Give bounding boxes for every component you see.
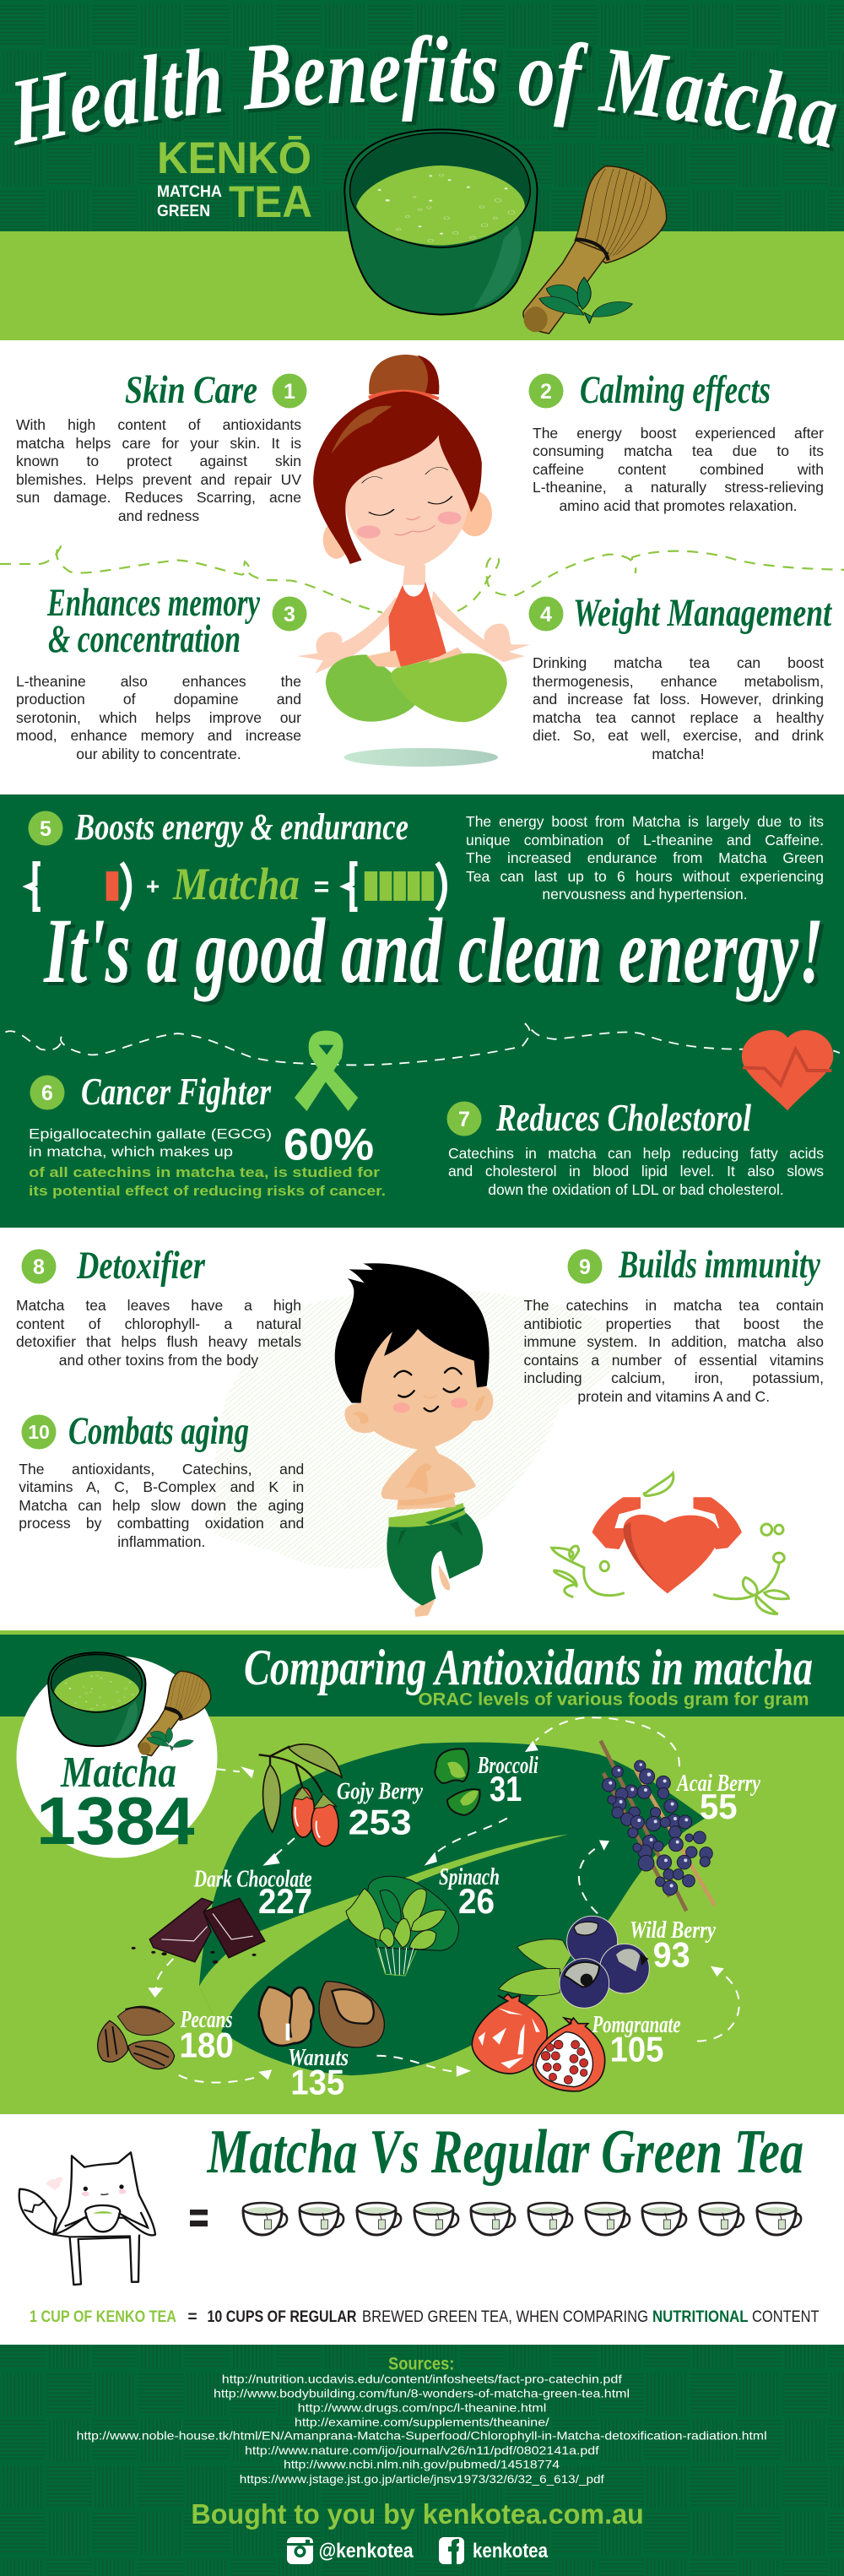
text: energy boost explanation: The increased endurance from Matcha Green [466, 849, 824, 866]
item 1: Skin Care: blemishes. Helps prevent and repair UV [16, 471, 301, 488]
item 9: Builds immunity: 9 [579, 1255, 591, 1279]
item 1: Skin Care: Skin Care [125, 368, 257, 412]
item 3: Enhances memory: serotonin, which helps improve our [16, 709, 301, 726]
item 3: Enhances memory: production of dopamine and [16, 691, 301, 708]
item 7: Reduces Cholestorol: Reduces Cholestorol [495, 1096, 751, 1139]
icon: awareness ribbon [295, 1031, 358, 1111]
item 10: Combats aging: vitamins A, C, B-Complex and K in [19, 1478, 304, 1495]
item 1: Skin Care: With high content of antioxidants [16, 416, 301, 433]
text: energy boost explanation [466, 813, 824, 906]
logo: Kenko Matcha Green Tea: MATCHA [157, 183, 222, 201]
food: broccoli: Broccoli [477, 1752, 538, 1779]
item 2: Calming effects: 2 [540, 380, 552, 404]
item 10: Combats aging: 10 [28, 1421, 50, 1443]
text: energy boost explanation: Tea can last up to 6 hours without experiencing [466, 868, 824, 885]
item 4: Weight Management [528, 591, 832, 767]
item 7: Reduces Cholestorol: Catechins in matcha can help reducing fatty acids [448, 1145, 824, 1162]
text: comparison statement: 1 CUP OF KENKO TEA [30, 2308, 176, 2326]
item 7: Reduces Cholestorol: down the oxidation of LDL or bad cholesterol. [488, 1181, 784, 1198]
item 2: Calming effects: The energy boost experienced after [533, 424, 824, 441]
white badge with matcha bowl: 1384 [36, 1783, 195, 1858]
text: comparison statement: 10 CUPS OF REGULAR [208, 2308, 357, 2326]
credit line: Bought to you by kenkotea.com.au [191, 2498, 644, 2530]
item 9: Builds immunity: contains a number of essential vitamins [523, 1352, 824, 1369]
item 3: Enhances memory: mood, enhance memory and increase [16, 727, 301, 744]
item 8: Detoxifier: content of chlorophyll- a natural [16, 1315, 301, 1332]
item 3: Enhances memory: 3 [284, 603, 295, 626]
subheading: ORAC levels: ORAC levels of various foods gram for gram [419, 1690, 809, 1709]
item 1: Skin Care: sun damage. Reduces Scarring, acne [16, 489, 301, 506]
icon: heart with pulse [742, 1030, 833, 1110]
item 6: Cancer Fighter: 60% [284, 1120, 374, 1170]
food: dark chocolate: Dark Chocolate [193, 1866, 312, 1893]
food: spinach: Spinach [439, 1863, 500, 1890]
food: dark chocolate: 227 [258, 1881, 312, 1921]
food: wild berry [499, 1916, 716, 2008]
sources list: http://www.noble-house.tk/html/EN/Amanprana-Matcha-Superfood/Chlorophyll-in-Matcha-detoxification-radiation.html [77, 2429, 767, 2443]
item 10: Combats aging: Combats aging [68, 1409, 249, 1453]
item 3: Enhances memory [16, 581, 307, 767]
item 9: Builds immunity: protein and vitamins A and C. [577, 1388, 770, 1405]
item 1: Skin Care: and redness [118, 507, 199, 524]
food: acai berry: Acai Berry [675, 1770, 760, 1797]
item 7: Reduces Cholestorol: 7 [458, 1108, 470, 1131]
logo: Kenko Matcha Green Tea: KENKŌ [157, 133, 311, 183]
item 8: Detoxifier: Detoxifier [76, 1244, 206, 1288]
food: walnuts [259, 1982, 384, 2102]
logo: Kenko Matcha Green Tea: TEA [229, 177, 312, 227]
item 4: Weight Management: 4 [540, 603, 552, 626]
item 9: Builds immunity: immune system. In addition, matcha also [523, 1333, 824, 1350]
item 2: Calming effects: L-theanine, a naturally stress-relieving [533, 479, 824, 496]
food: acai berry [601, 1741, 760, 1911]
item 9: Builds immunity [523, 1243, 824, 1408]
item 4: Weight Management: and increase fat loss. However, drinking [533, 691, 824, 708]
equals sign [190, 2210, 208, 2226]
food: wild berry: Wild Berry [630, 1917, 716, 1944]
item 10: Combats aging: Matcha can help slow down the aging [19, 1497, 304, 1514]
sources list: https://www.jstage.jst.go.jp/article/jnsv1973/32/6/32_6_613/_pdf [240, 2472, 604, 2486]
item 10: Combats aging: inflammation. [117, 1533, 205, 1550]
item 1: Skin Care: matcha helps care for your skin. It is [16, 435, 301, 452]
item 6: Cancer Fighter: of all catechins in matcha tea, is studied for [29, 1164, 380, 1180]
item 8: Detoxifier: detoxifier that helps flush heavy metals [16, 1333, 301, 1350]
panel: benefits 8 to 10 [0, 1228, 844, 1631]
food: walnuts: 135 [290, 2063, 344, 2102]
item 6: Cancer Fighter: its potential effect of reducing risks of cancer. [29, 1183, 386, 1199]
item 4: Weight Management: thermogenesis, enhance metabolism, [533, 673, 824, 690]
title: Health Benefits of Matcha [14, 35, 841, 151]
item 8: Detoxifier [16, 1244, 301, 1371]
text: comparison statement [30, 2308, 820, 2326]
sources list: Sources: [388, 2355, 454, 2374]
icon: matcha bowl and whisk [344, 129, 667, 334]
item 3: Enhances memory: our ability to concentrate. [76, 746, 241, 762]
food: pomegranate: 105 [610, 2030, 663, 2069]
item 3: Enhances memory: & concentration [48, 617, 241, 661]
item 10: Combats aging: process by combatting oxidation and [19, 1515, 304, 1532]
energy equation: battery plus matcha: Matcha [172, 859, 300, 909]
food: pomegranate: Pomgranate [592, 2011, 681, 2038]
item 8: Detoxifier: and other toxins from the body [59, 1352, 258, 1369]
item 4: Weight Management: matcha tea cannot replace a healthy [533, 709, 824, 726]
item 5: Boosts energy heading: 5 [40, 817, 51, 841]
icon: instagram handle: @kenkotea [319, 2540, 414, 2562]
item 9: Builds immunity: including calcium, iron, potassium, [523, 1369, 824, 1386]
text: energy boost explanation: unique combination of L-theanine and Caffeine. [466, 832, 824, 849]
item 7: Reduces Cholestorol: and cholesterol in blood lipid level. It also slows [448, 1163, 824, 1180]
text: energy boost explanation: nervousness and hypertension. [542, 886, 748, 903]
item 9: Builds immunity: The catechins in matcha tea contain [523, 1297, 824, 1314]
item 8: Detoxifier: 8 [33, 1255, 45, 1279]
energy equation: battery plus matcha: = [314, 871, 329, 902]
text: energy boost explanation: The energy boost from Matcha is largely due to its [466, 813, 824, 830]
item 6: Cancer Fighter: Cancer Fighter [81, 1070, 272, 1113]
food: goji berry [259, 1744, 423, 1847]
sources list: http://examine.com/supplements/theanine/ [295, 2415, 549, 2428]
food: goji berry: Gojy Berry [337, 1778, 423, 1805]
icon: strong heart with vines [552, 1473, 788, 1614]
energy equation: battery plus matcha [29, 859, 445, 910]
food: acai berry: 55 [700, 1787, 738, 1826]
item 2: Calming effects: caffeine content combined with [533, 461, 824, 478]
item 2: Calming effects: Calming effects [580, 368, 771, 412]
item 4: Weight Management: matcha! [652, 746, 705, 762]
text: comparison statement: = [187, 2308, 197, 2326]
item 4: Weight Management: Drinking matcha tea can boost [533, 654, 824, 671]
dashed arrows between foods [148, 1717, 739, 2083]
logo: Kenko Matcha Green Tea: GREEN [157, 203, 210, 220]
item 10: Combats aging: The antioxidants, Catechins, and [19, 1461, 304, 1478]
sources list: http://www.nature.com/ijo/journal/v26/n11/pdf/0802141a.pdf [245, 2443, 599, 2457]
item 6: Cancer Fighter [29, 1070, 386, 1199]
item 2: Calming effects [528, 368, 824, 518]
item 3: Enhances memory: Enhances memory [46, 581, 260, 625]
item 6: Cancer Fighter: in matcha, which makes up [29, 1143, 233, 1160]
illustration: boy in tree pose [335, 1263, 493, 1617]
food: pecans: 180 [179, 2026, 234, 2065]
item 1: Skin Care: known to protect against skin [16, 453, 301, 469]
item 2: Calming effects: amino acid that promotes relaxation. [559, 497, 798, 514]
icon: instagram handle [287, 2537, 414, 2564]
sources list: http://www.bodybuilding.com/fun/8-wonders-of-matcha-green-tea.html [214, 2387, 630, 2400]
item 2: Calming effects: consuming matcha tea due to its [533, 442, 824, 459]
illustration: meditating girl [297, 355, 530, 767]
sources list [77, 2355, 767, 2486]
text: comparison statement: BREWED GREEN TEA, WHEN COMPARING [362, 2308, 648, 2326]
food: goji berry: 253 [349, 1803, 412, 1842]
item 1: Skin Care [16, 368, 307, 530]
food: walnuts: Wanuts [288, 2044, 349, 2071]
energy equation: battery plus matcha: + [146, 873, 160, 899]
item 1: Skin Care: 1 [284, 380, 295, 404]
item 7: Reduces Cholestorol [447, 1096, 824, 1201]
panel: comparing antioxidants [0, 1630, 844, 2114]
item 10: Combats aging [19, 1409, 304, 1554]
sources list: http://www.drugs.com/npc/l-theanine.html [298, 2401, 546, 2415]
item 8: Detoxifier: Matcha tea leaves have a high [16, 1297, 301, 1314]
food: broccoli [435, 1749, 538, 1815]
logo: Kenko Matcha Green Tea [157, 133, 312, 227]
item 5: Boosts energy heading: Boosts energy & endurance [74, 806, 408, 848]
row of ten tea cups [243, 2203, 801, 2235]
panel: header [0, 0, 844, 340]
text: comparison statement: CONTENT [752, 2308, 820, 2326]
panel: matcha vs regular green tea [0, 2114, 844, 2345]
sources list: http://nutrition.ucdavis.edu/content/infosheets/fact-pro-catechin.pdf [222, 2373, 622, 2386]
background leaf [199, 1743, 706, 2075]
food: broccoli: 31 [490, 1769, 522, 1809]
illustration: fox drinking matcha [19, 2152, 155, 2285]
panel: energy and items 5 to 7 [0, 794, 844, 1228]
icon: facebook handle: kenkotea [473, 2540, 549, 2562]
text: comparison statement: NUTRITIONAL [652, 2308, 749, 2326]
food: pecans [98, 2006, 234, 2069]
sources list: http://www.ncbi.nlm.nih.gov/pubmed/14518774 [284, 2458, 560, 2471]
food: wild berry: 93 [653, 1935, 690, 1974]
item 6: Cancer Fighter: 6 [41, 1082, 53, 1105]
item 6: Cancer Fighter: Epigallocatechin gallate (EGCG) [29, 1126, 272, 1142]
item 3: Enhances memory: L-theanine also enhances the [16, 672, 301, 689]
icon: facebook handle [439, 2537, 549, 2564]
item 9: Builds immunity: antibiotic properties that boost the [523, 1315, 824, 1332]
panel: benefits 1 to 4 [0, 340, 844, 794]
food: pomegranate [472, 1994, 681, 2091]
white badge with matcha bowl: Matcha [60, 1749, 176, 1797]
dashed vine lines [0, 545, 844, 612]
food: dark chocolate [132, 1866, 312, 1964]
panel: footer [0, 2345, 844, 2576]
white badge with matcha bowl [17, 1652, 218, 1858]
item 4: Weight Management: diet. So, eat well, exercise, and drink [533, 727, 824, 744]
food: pecans: Pecans [180, 2006, 233, 2033]
food: spinach [346, 1863, 500, 1976]
food: spinach: 26 [458, 1881, 495, 1921]
